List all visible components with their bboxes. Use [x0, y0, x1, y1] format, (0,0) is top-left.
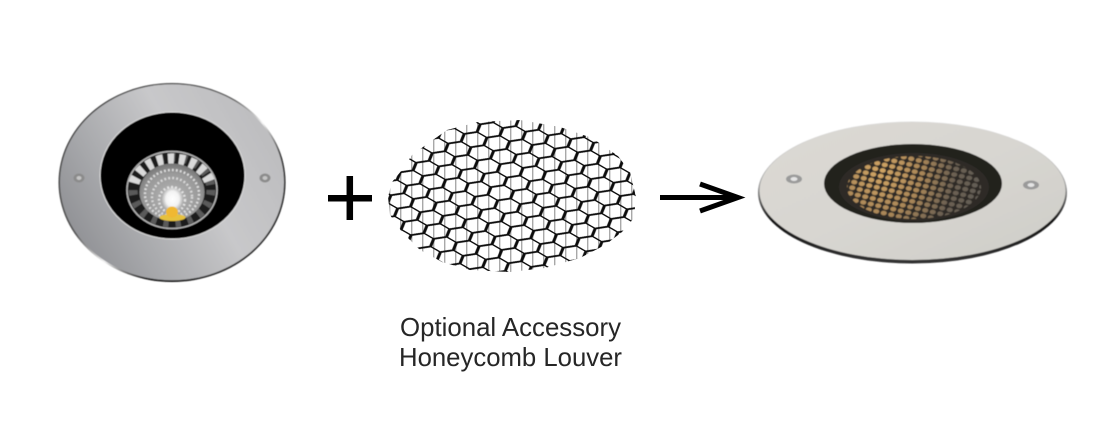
amber louver cells — [846, 155, 982, 220]
screw right — [1023, 180, 1039, 190]
steel faceplate — [58, 83, 286, 282]
infographic canvas — [58, 82, 1068, 372]
screw right — [260, 174, 270, 182]
dark opening — [824, 144, 1002, 223]
honeycomb louver — [388, 120, 636, 272]
lamp: recessed uplight, front view — [58, 83, 286, 282]
black inner housing — [100, 112, 245, 239]
reflector — [127, 152, 217, 228]
plus sign — [328, 176, 372, 220]
steel faceplate — [758, 122, 1067, 264]
screw left — [786, 174, 802, 184]
screw left — [74, 174, 84, 182]
caption: Honeycomb Louver — [399, 342, 622, 372]
arrow — [660, 184, 738, 211]
caption: Optional Accessory — [400, 312, 621, 342]
LED hot spot — [160, 186, 186, 221]
caption — [399, 312, 622, 372]
lamp: with honeycomb louver fitted, perspective view — [758, 122, 1067, 264]
